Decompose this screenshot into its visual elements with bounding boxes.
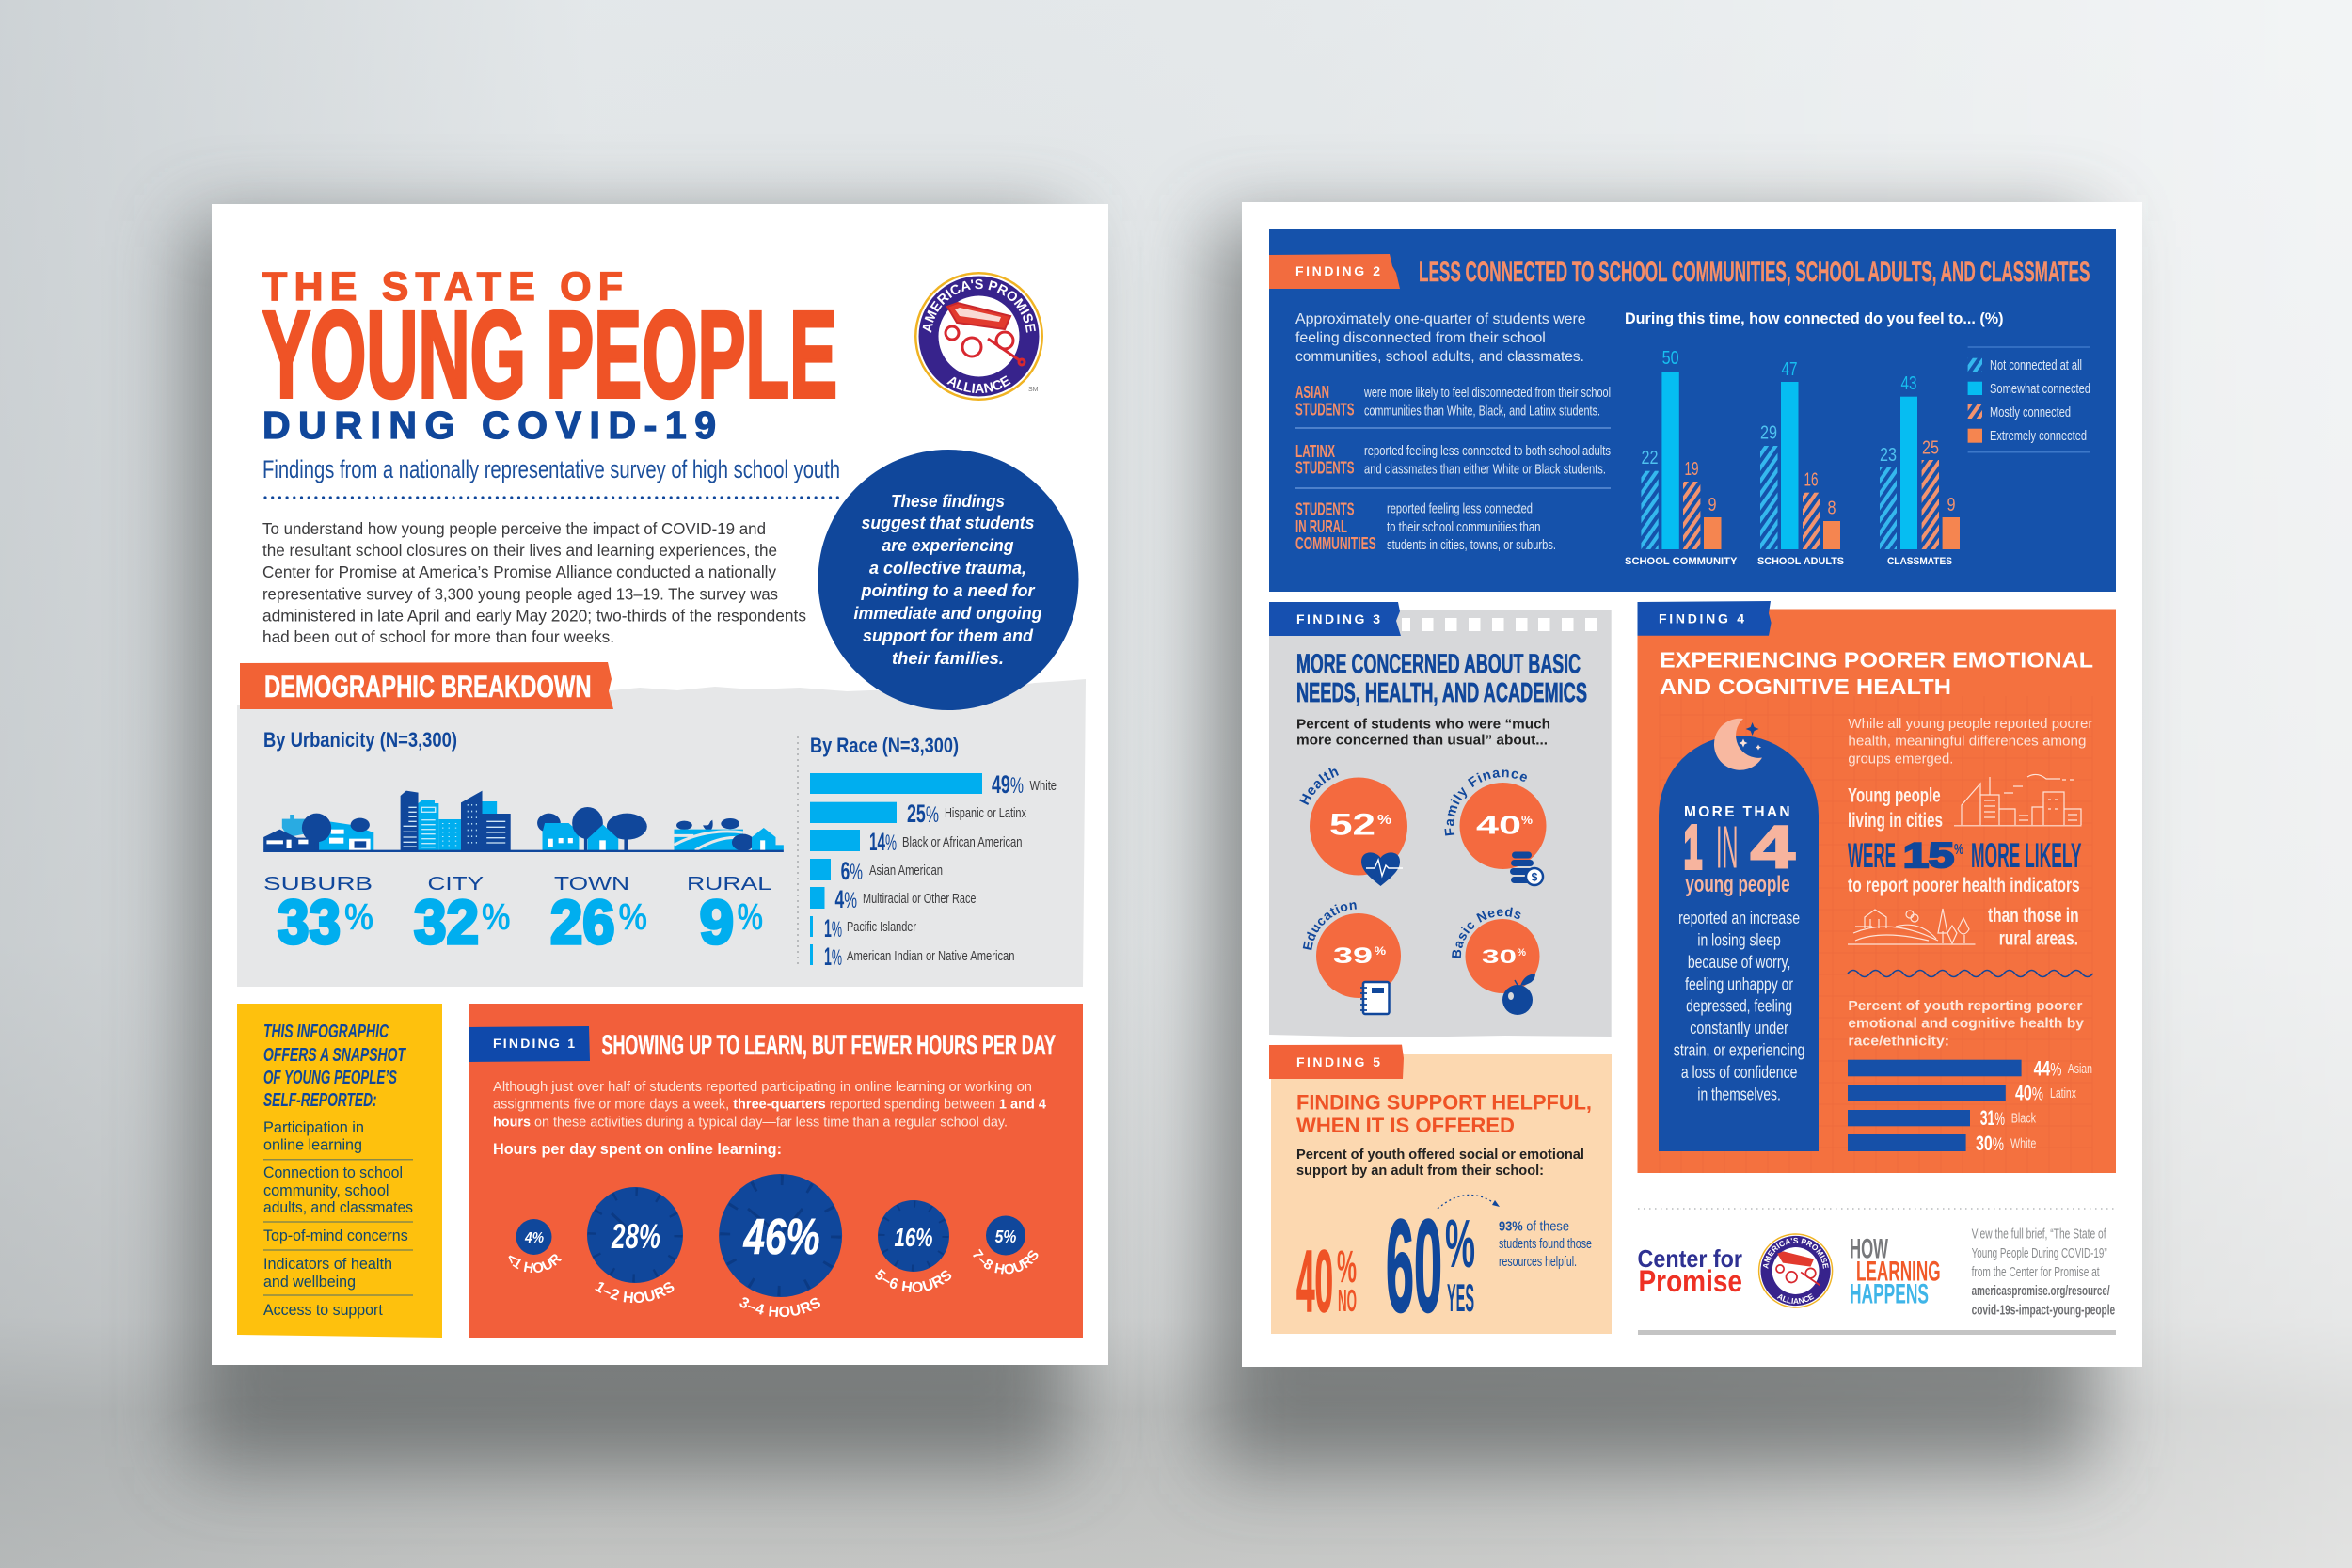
list: snapshot items: adults, and classmates <box>263 1198 413 1216</box>
icon: town <box>537 807 647 850</box>
panel: finding 5: % <box>1445 1207 1475 1282</box>
bar chart: race: Hispanic or Latinx <box>945 805 1026 821</box>
icon: heart <box>1361 852 1403 886</box>
stat: 1 in 4: 1 <box>1684 814 1702 881</box>
bar chart: race: 25% <box>907 800 939 828</box>
text: sleep symptoms: constantly under <box>1690 1019 1788 1037</box>
stat: rural: 9 <box>700 887 734 957</box>
bars: school community: 9 <box>1708 495 1716 515</box>
stat: education: % <box>1375 944 1387 958</box>
text: full brief link: from the Center for Promise at <box>1972 1264 2100 1280</box>
stat: city: CITY <box>427 874 484 895</box>
panel: finding 5: % <box>1337 1243 1357 1292</box>
text: 93 percent callout: 93% of these <box>1499 1219 1569 1234</box>
heading: snapshot: OF YOUNG PEOPLE’S <box>263 1068 397 1088</box>
clock: 3-4 hours: 46% <box>743 1209 820 1265</box>
callout: findings circle: suggest that students <box>862 514 1035 532</box>
stat: education: Education <box>1302 902 1357 950</box>
text: finding 5 subhead <box>1296 1148 1584 1179</box>
stat: suburb: 33 <box>278 887 341 957</box>
stat: education <box>1299 896 1401 1014</box>
bar chart: health by race: 30% <box>1976 1132 2004 1155</box>
bar chart: race: 1% <box>824 914 842 942</box>
text: asian students <box>1295 383 1611 420</box>
text: finding 1 body: assignments five or more days a week, three-quarters reported spending between 1 and 4 <box>493 1097 1047 1113</box>
callout: findings circle: are experiencing <box>882 536 1014 555</box>
text: percent reporting subhead: emotional and cognitive health by <box>1848 1016 2084 1031</box>
intro text: representative survey of 3,300 young people aged 13–19. The survey was <box>262 585 778 604</box>
title: DURING COVID-19 <box>262 404 716 447</box>
heading: by race: By Race (N=3,300) <box>810 734 959 757</box>
bar chart: race: 14% <box>869 828 897 856</box>
bars: school adults: 8 <box>1827 499 1836 519</box>
stat: rural: RURAL <box>687 874 771 895</box>
heading: finding 4: AND COGNITIVE HEALTH <box>1660 674 1951 699</box>
list: snapshot items: Access to support <box>263 1301 383 1319</box>
title <box>262 264 837 447</box>
text: finding 5 subhead: Percent of youth offered social or emotional <box>1296 1148 1584 1163</box>
stat: 40 percent no <box>1296 1232 1357 1330</box>
icon: city outline <box>1954 774 2081 826</box>
bars: school community: 50 <box>1662 348 1679 369</box>
bar chart: health by race: Black <box>2011 1112 2037 1127</box>
callout: findings circle: These findings <box>891 492 1005 511</box>
icon: city <box>401 791 511 850</box>
list: snapshot items: Indicators of health <box>263 1255 392 1273</box>
stat: 1 in 4: 4 <box>1750 814 1796 881</box>
panel: one in four arch: MORE THAN <box>1684 804 1790 820</box>
stat: family finance <box>1442 766 1547 885</box>
panel: snapshot <box>237 1004 442 1338</box>
heading: by urbanicity: By Urbanicity (N=3,300) <box>263 728 457 752</box>
bar chart: connectedness <box>1625 348 1960 567</box>
bar chart: race: 4% <box>835 885 857 913</box>
heading: snapshot: OFFERS A SNAPSHOT <box>263 1045 406 1066</box>
logo: how learning happens: LEARNING <box>1856 1257 1941 1288</box>
stat: health <box>1296 764 1407 886</box>
icon: rural <box>675 818 784 851</box>
logo: center for promise: Center for <box>1637 1244 1742 1273</box>
stat: city: 32 <box>414 887 479 957</box>
text: poorer indicators: to report poorer health indicators <box>1848 875 2080 896</box>
panel: demographic breakdown <box>237 450 1086 987</box>
panel: finding 3 <box>1269 602 1612 1037</box>
text: 93 percent callout <box>1499 1219 1592 1270</box>
clock: 3-4 hours <box>719 1174 842 1321</box>
text: sleep symptoms: because of worry, <box>1688 953 1790 972</box>
panel: left page <box>212 204 1108 1365</box>
callout: findings circle: support for them and <box>863 626 1034 645</box>
bars: school adults: 16 <box>1804 470 1818 491</box>
logo: America's Promise Alliance: AMERICA'S PROMISE <box>922 278 1036 333</box>
stat: family finance: % <box>1521 813 1533 827</box>
heading: finding 1: SHOWING UP TO LEARN, BUT FEWER HOURS PER DAY <box>602 1030 1056 1061</box>
intro text: Center for Promise at America’s Promise Alliance conducted a nationally <box>262 562 776 581</box>
intro text: had been out of school for more than four weeks. <box>262 627 614 646</box>
logo: America's Promise Alliance <box>914 272 1043 401</box>
callout: findings circle: a collective trauma, <box>869 559 1026 578</box>
panel: finding 1 <box>469 1004 1083 1338</box>
text: sleep symptoms: in themselves. <box>1697 1085 1781 1104</box>
text: finding 2 intro: Approximately one-quarter of students were <box>1295 311 1586 327</box>
bar chart: race: Pacific Islander <box>847 919 916 935</box>
bars: school community: 19 <box>1684 459 1699 480</box>
tag: finding 1 <box>469 1026 590 1062</box>
logo: america's promise alliance small: AMERICA'S PROMISE <box>1763 1238 1829 1269</box>
tag: finding 2: FINDING 2 <box>1295 263 1380 278</box>
panel: one in four arch <box>1659 719 1819 1151</box>
bar chart: race: Black or African American <box>902 834 1022 850</box>
text: finding 5 subhead: support by an adult from their school: <box>1296 1164 1544 1179</box>
clock: 1-2 hours: 1–2 HOURS <box>595 1282 674 1304</box>
text: rural students: STUDENTS <box>1295 500 1355 519</box>
list: snapshot items: Participation in <box>263 1118 364 1136</box>
legend: Not connected at all <box>1990 357 2082 373</box>
icon: rural outline <box>1848 909 1976 944</box>
list: snapshot items <box>263 1118 413 1319</box>
text: sleep symptoms: a loss of confidence <box>1681 1063 1797 1082</box>
bars: school adults: 29 <box>1760 423 1777 444</box>
text: finding 1 body <box>493 1079 1047 1130</box>
stat: health: % <box>1377 812 1391 828</box>
clock: under 1 hour <box>508 1219 563 1274</box>
bar chart: race: White <box>1029 778 1057 794</box>
stat: health: 52 <box>1329 808 1375 842</box>
heading: snapshot: THIS INFOGRAPHIC <box>263 1022 389 1042</box>
bar chart: race: 49% <box>992 770 1024 799</box>
subtitle: Findings from a nationally representative survey of high school youth <box>262 455 840 483</box>
heading: finding 5: WHEN IT IS OFFERED <box>1296 1114 1515 1137</box>
text: sleep symptoms <box>1674 909 1804 1104</box>
stat: 60 percent yes: 60 <box>1386 1192 1442 1339</box>
text: 93 percent callout: resources helpful. <box>1499 1254 1577 1270</box>
tag: finding 4 <box>1637 601 1772 636</box>
bars: classmates: 23 <box>1880 445 1897 466</box>
logo: how learning happens <box>1850 1233 1941 1310</box>
legend: Somewhat connected <box>1990 381 2090 397</box>
intro text <box>262 519 806 646</box>
text: latinx students: STUDENTS <box>1295 459 1355 478</box>
stat: basic needs: Basic Needs <box>1452 907 1520 958</box>
text: rural students: students in cities, towns, or suburbs. <box>1387 537 1556 553</box>
clock: 5-6 hours <box>871 1200 956 1296</box>
logo: how learning happens: HAPPENS <box>1850 1279 1929 1310</box>
text: young people in cities: Young people <box>1848 784 1941 806</box>
text: young people in cities <box>1848 784 1943 832</box>
arrow: dotted <box>1438 1195 1500 1209</box>
clock: under 1 hour: <1 HOUR <box>508 1254 563 1274</box>
bars: school community <box>1625 348 1738 567</box>
text: than those in rural areas: rural areas. <box>1999 928 2078 950</box>
text: rural students <box>1295 500 1556 553</box>
chart: hours per day clocks <box>508 1174 1039 1317</box>
panel: right page <box>1242 202 2142 1367</box>
text: sleep symptoms: feeling unhappy or <box>1685 974 1793 993</box>
list: snapshot items: Connection to school <box>263 1164 403 1181</box>
heading: finding 5: FINDING SUPPORT HELPFUL, <box>1296 1091 1592 1114</box>
text: latinx students: LATINX <box>1295 442 1335 461</box>
intro text: the resultant school closures on their lives and learning experiences, the <box>262 541 777 560</box>
stat: family finance: 40 <box>1476 811 1521 840</box>
text: finding 2 intro: communities, school adults, and classmates. <box>1295 349 1584 365</box>
icon: apple <box>1502 974 1535 1015</box>
text: asian students: ASIAN <box>1295 383 1329 402</box>
heading: snapshot <box>263 1022 406 1111</box>
text: hours heading: Hours per day spent on online learning: <box>493 1141 782 1158</box>
bars: classmates: CLASSMATES <box>1887 556 1952 567</box>
bars: classmates <box>1880 373 1960 567</box>
bar chart: health by race: 44% <box>2034 1057 2061 1080</box>
stat: town <box>550 874 647 957</box>
tag: finding 3: FINDING 3 <box>1296 611 1380 626</box>
stats: urbanicity <box>263 874 771 957</box>
clock: 7-8 hours: 5% <box>995 1227 1016 1246</box>
heading: demographic breakdown <box>240 662 613 709</box>
text: finding 2 intro: feeling disconnected from their school <box>1295 330 1546 346</box>
clock: 7-8 hours: 7–8 HOURS <box>973 1249 1039 1274</box>
intro text: To understand how young people perceive the impact of COVID-19 and <box>262 519 766 538</box>
legend: Extremely connected <box>1990 428 2087 444</box>
bar chart: health by race: Latinx <box>2050 1086 2077 1101</box>
text: sleep symptoms: in losing sleep <box>1697 931 1781 950</box>
text: young people in cities: living in cities <box>1848 810 1943 832</box>
text: latinx students: reported feeling less connected to both school adults <box>1364 443 1611 459</box>
clock: 5-6 hours: 5–6 HOURS <box>875 1269 952 1292</box>
clock: 1-2 hours: 28% <box>611 1217 660 1256</box>
logo: america's promise alliance small <box>1758 1233 1833 1308</box>
logo: america's promise alliance small: ALLIANCE <box>1776 1293 1814 1304</box>
legend <box>1968 347 2090 452</box>
text: finding 4 intro <box>1848 717 2093 768</box>
text: latinx students <box>1295 442 1611 478</box>
stat: 60 percent yes <box>1386 1192 1475 1339</box>
clock: 7-8 hours <box>968 1215 1043 1278</box>
tag: finding 1: FINDING 1 <box>493 1036 575 1051</box>
callout: findings circle: pointing to a need for <box>860 581 1035 600</box>
tag: finding 4: FINDING 4 <box>1659 611 1744 626</box>
panel: finding 5 <box>1269 1045 1612 1339</box>
heading: finding 3 <box>1296 650 1587 708</box>
bar chart: health by race: Asian <box>2068 1062 2092 1077</box>
clock: 3-4 hours: 3–4 HOURS <box>739 1297 820 1317</box>
text: were 15 percent more likely: % <box>1954 842 1963 858</box>
bar chart: race: American Indian or Native American <box>847 948 1014 964</box>
bars: school adults: SCHOOL ADULTS <box>1757 556 1844 567</box>
stat: suburb: % <box>344 896 373 938</box>
icon: notebook <box>1360 982 1389 1014</box>
heading: finding 4 <box>1660 648 2093 699</box>
text: finding 1 body: hours on these activities during a typical day—far less time than a regular school day. <box>493 1114 1008 1130</box>
text: percent reporting subhead: race/ethnicity: <box>1848 1035 1949 1050</box>
text: rural students: IN RURAL <box>1295 517 1347 536</box>
logo: how learning happens: HOW <box>1850 1233 1888 1264</box>
text: rural students: to their school communities than <box>1387 519 1541 535</box>
text: finding 4 intro: groups emerged. <box>1848 752 1953 768</box>
bars: classmates: 25 <box>1922 438 1939 459</box>
heading: finding 4: EXPERIENCING POORER EMOTIONAL <box>1660 648 2093 673</box>
text: finding 3 subhead: Percent of students who were “much <box>1296 717 1550 732</box>
bar chart: health by race: White <box>2010 1136 2036 1151</box>
stat: 40 percent no: 40 <box>1296 1232 1333 1330</box>
icon: moon and stars <box>1714 719 1762 770</box>
text: rural students: COMMUNITIES <box>1295 534 1376 553</box>
stat: basic needs: 30 <box>1482 946 1517 968</box>
text: full brief link: Young People During COVID-19” <box>1972 1245 2107 1261</box>
stat: basic needs <box>1449 904 1539 1015</box>
text: full brief link: View the full brief, “The State of <box>1972 1227 2106 1243</box>
heading: finding 3: NEEDS, HEALTH, AND ACADEMICS <box>1296 678 1587 708</box>
callout: findings circle: immediate and ongoing <box>854 604 1042 623</box>
stat: 1 in 4 <box>1684 814 1796 881</box>
chart title: connectedness: During this time, how connected do you feel to... (%) <box>1625 310 2004 327</box>
stat: city <box>414 874 510 957</box>
bars: classmates: 9 <box>1947 495 1955 515</box>
icon: coins: $ <box>1532 871 1538 884</box>
title: THE STATE OF <box>262 264 623 309</box>
text: asian students: STUDENTS <box>1295 401 1355 420</box>
title: YOUNG PEOPLE <box>262 285 837 423</box>
panel: finding 4: MORE LIKELY <box>1971 836 2082 875</box>
icons: skyline <box>263 791 784 852</box>
text: than those in rural areas <box>1988 905 2079 950</box>
text: sleep symptoms: depressed, feeling <box>1686 997 1792 1016</box>
heading: snapshot: SELF-REPORTED: <box>263 1090 377 1111</box>
clock: 1-2 hours <box>587 1187 683 1304</box>
icon: suburb <box>263 814 373 850</box>
list: snapshot items: and wellbeing <box>263 1273 356 1291</box>
stat: family finance: Family Finance <box>1445 769 1527 835</box>
text: were 15 percent more likely: WERE <box>1848 836 1896 875</box>
panel: finding 4 <box>1637 601 2116 1173</box>
text: asian students: were more likely to feel disconnected from their school <box>1363 385 1611 401</box>
notebook holes <box>1402 618 1597 631</box>
panel: finding 5: YES <box>1447 1275 1474 1320</box>
panel: one in four arch: young people <box>1685 872 1790 897</box>
heading: finding 3: MORE CONCERNED ABOUT BASIC <box>1296 650 1581 680</box>
heading: finding 5 <box>1296 1091 1592 1137</box>
text: finding 1 body: Although just over half of students reported participating in online learning or working on <box>493 1079 1032 1095</box>
bars: school adults: 47 <box>1782 359 1797 380</box>
text: rural students: reported feeling less connected <box>1387 501 1533 517</box>
list: snapshot items: online learning <box>263 1136 362 1154</box>
bars: classmates: 43 <box>1900 373 1917 394</box>
clock: under 1 hour: 4% <box>524 1230 544 1246</box>
stat: health: Health <box>1299 768 1339 805</box>
logo: America's Promise Alliance: ALLIANCE <box>946 375 1011 393</box>
logo: center for promise <box>1637 1244 1742 1298</box>
bar chart: race <box>810 770 1057 971</box>
stat: suburb: SUBURB <box>263 874 373 895</box>
text: finding 3 subhead: more concerned than usual” about... <box>1296 734 1548 749</box>
text: sleep symptoms: reported an increase <box>1678 909 1800 927</box>
stat: town: % <box>619 896 647 938</box>
callout: findings circle: their families. <box>892 649 1004 668</box>
callout: findings circle <box>818 450 1078 710</box>
bar chart: race: Multiracial or Other Race <box>863 891 977 907</box>
text: than those in rural areas: than those in <box>1988 905 2079 927</box>
stat: town: 26 <box>550 887 615 957</box>
intro text: administered in late April and early May 2020; two-thirds of the respondents <box>262 606 806 625</box>
bar chart: race: Asian American <box>869 863 943 879</box>
text: 93 percent callout: students found those <box>1499 1236 1592 1252</box>
bar chart: health by race <box>1848 1057 2092 1155</box>
stat: 1 in 4: IN <box>1716 814 1739 881</box>
stat: rural: % <box>738 896 763 938</box>
stat: city: % <box>482 896 510 938</box>
logo: center for promise: Promise <box>1639 1264 1742 1298</box>
text: finding 4 intro: health, meaningful differences among <box>1848 734 2086 749</box>
tag: finding 3 <box>1269 602 1401 636</box>
stat: education: 39 <box>1333 943 1373 969</box>
text: full brief link: covid-19s-impact-young-people <box>1972 1303 2115 1319</box>
text: asian students: communities than White, Black, and Latinx students. <box>1364 404 1600 420</box>
text: percent reporting subhead: Percent of youth reporting poorer <box>1848 999 2083 1014</box>
text: percent reporting subhead <box>1848 999 2084 1050</box>
bar chart: race: 1% <box>824 942 842 971</box>
text: full brief link <box>1972 1227 2115 1319</box>
bars: school adults <box>1757 359 1844 567</box>
legend: Mostly connected <box>1990 404 2071 420</box>
stat: suburb <box>263 874 373 957</box>
text: sleep symptoms: strain, or experiencing <box>1674 1041 1804 1060</box>
text: were 15 percent more likely: 15 <box>1903 836 1954 875</box>
panel: finding 2 <box>1269 229 2116 592</box>
list: snapshot items: community, school <box>263 1181 389 1199</box>
stat: rural <box>687 874 771 957</box>
list: snapshot items: Top-of-mind concerns <box>263 1227 408 1244</box>
footer: logos and link <box>1637 1227 2115 1319</box>
bars: school community: 22 <box>1641 448 1658 468</box>
stat: basic needs: % <box>1517 947 1526 958</box>
panel: finding 5: NO <box>1338 1283 1357 1318</box>
text: finding 3 subhead <box>1296 717 1550 749</box>
heading: demographic breakdown: DEMOGRAPHIC BREAKDOWN <box>264 670 591 704</box>
logo: America's Promise Alliance: SM <box>1028 387 1039 393</box>
text: were 15 percent more likely <box>1848 836 2082 875</box>
bar chart: health by race: 40% <box>2015 1082 2043 1105</box>
text: finding 2 intro <box>1295 311 1586 365</box>
bars: school community: SCHOOL COMMUNITY <box>1625 556 1738 567</box>
tag: finding 5 <box>1269 1045 1404 1079</box>
bar chart: health by race: 31% <box>1980 1106 2005 1130</box>
tag: finding 2 <box>1269 254 1400 289</box>
clock: 5-6 hours: 16% <box>894 1223 933 1252</box>
tag: finding 5: FINDING 5 <box>1296 1054 1380 1069</box>
bar chart: race: 6% <box>841 857 863 885</box>
text: full brief link: americaspromise.org/resource/ <box>1972 1283 2110 1299</box>
text: latinx students: and classmates than either White or Black students. <box>1364 462 1606 478</box>
stat: town: TOWN <box>554 874 629 895</box>
text: finding 4 intro: While all young people reported poorer <box>1848 717 2093 732</box>
